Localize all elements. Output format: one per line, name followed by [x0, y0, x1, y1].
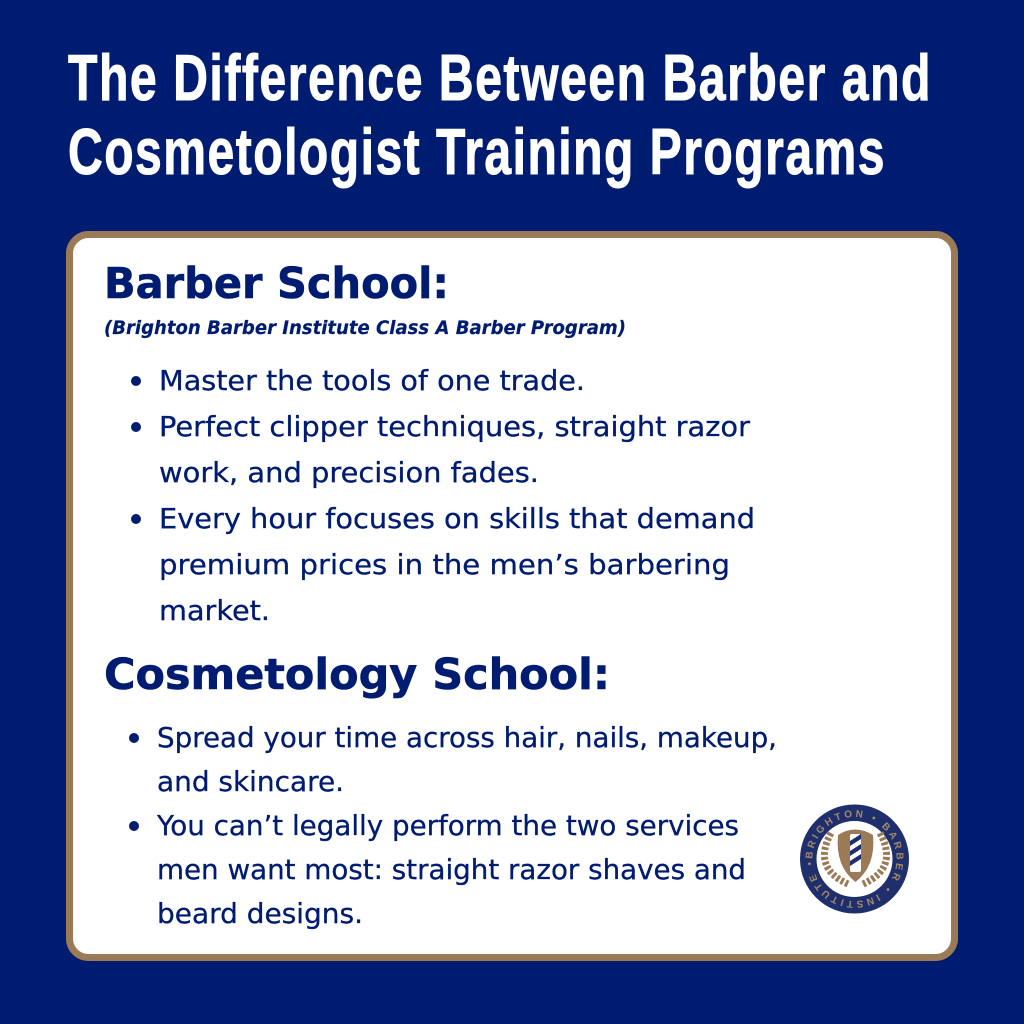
- list: cosmetology school points: and skincare.: [157, 765, 344, 798]
- list: cosmetology school points: men want most: straight razor shaves and: [157, 853, 746, 886]
- list: barber school points: Master the tools of one trade.: [159, 364, 585, 397]
- list: barber school points: Every hour focuses on skills that demand: [159, 502, 755, 535]
- heading: barber school: Barber School:: [104, 259, 449, 309]
- list: cosmetology school points: You can’t legally perform the two services: [156, 809, 739, 842]
- list: barber school points: [131, 364, 755, 627]
- list: cosmetology school points: Spread your time across hair, nails, makeup,: [157, 721, 777, 754]
- list: barber school points: premium prices in the men’s barbering: [159, 548, 730, 581]
- list: barber school points: market.: [159, 594, 270, 627]
- list: cosmetology school points: [129, 721, 777, 930]
- subheading: barber program: (Brighton Barber Institute Class A Barber Program): [104, 317, 626, 339]
- panel: comparison card: [66, 231, 958, 961]
- list: cosmetology school points: beard designs.: [157, 897, 363, 930]
- title: [68, 41, 932, 188]
- list: barber school points: Perfect clipper techniques, straight razor: [159, 410, 750, 443]
- icon: Brighton Barber Institute logo: BRIGHTON • BARBER • INSTITUTE •: [805, 810, 904, 908]
- list: barber school points: work, and precision fades.: [159, 456, 539, 489]
- heading: cosmetology school: Cosmetology School:: [104, 650, 610, 700]
